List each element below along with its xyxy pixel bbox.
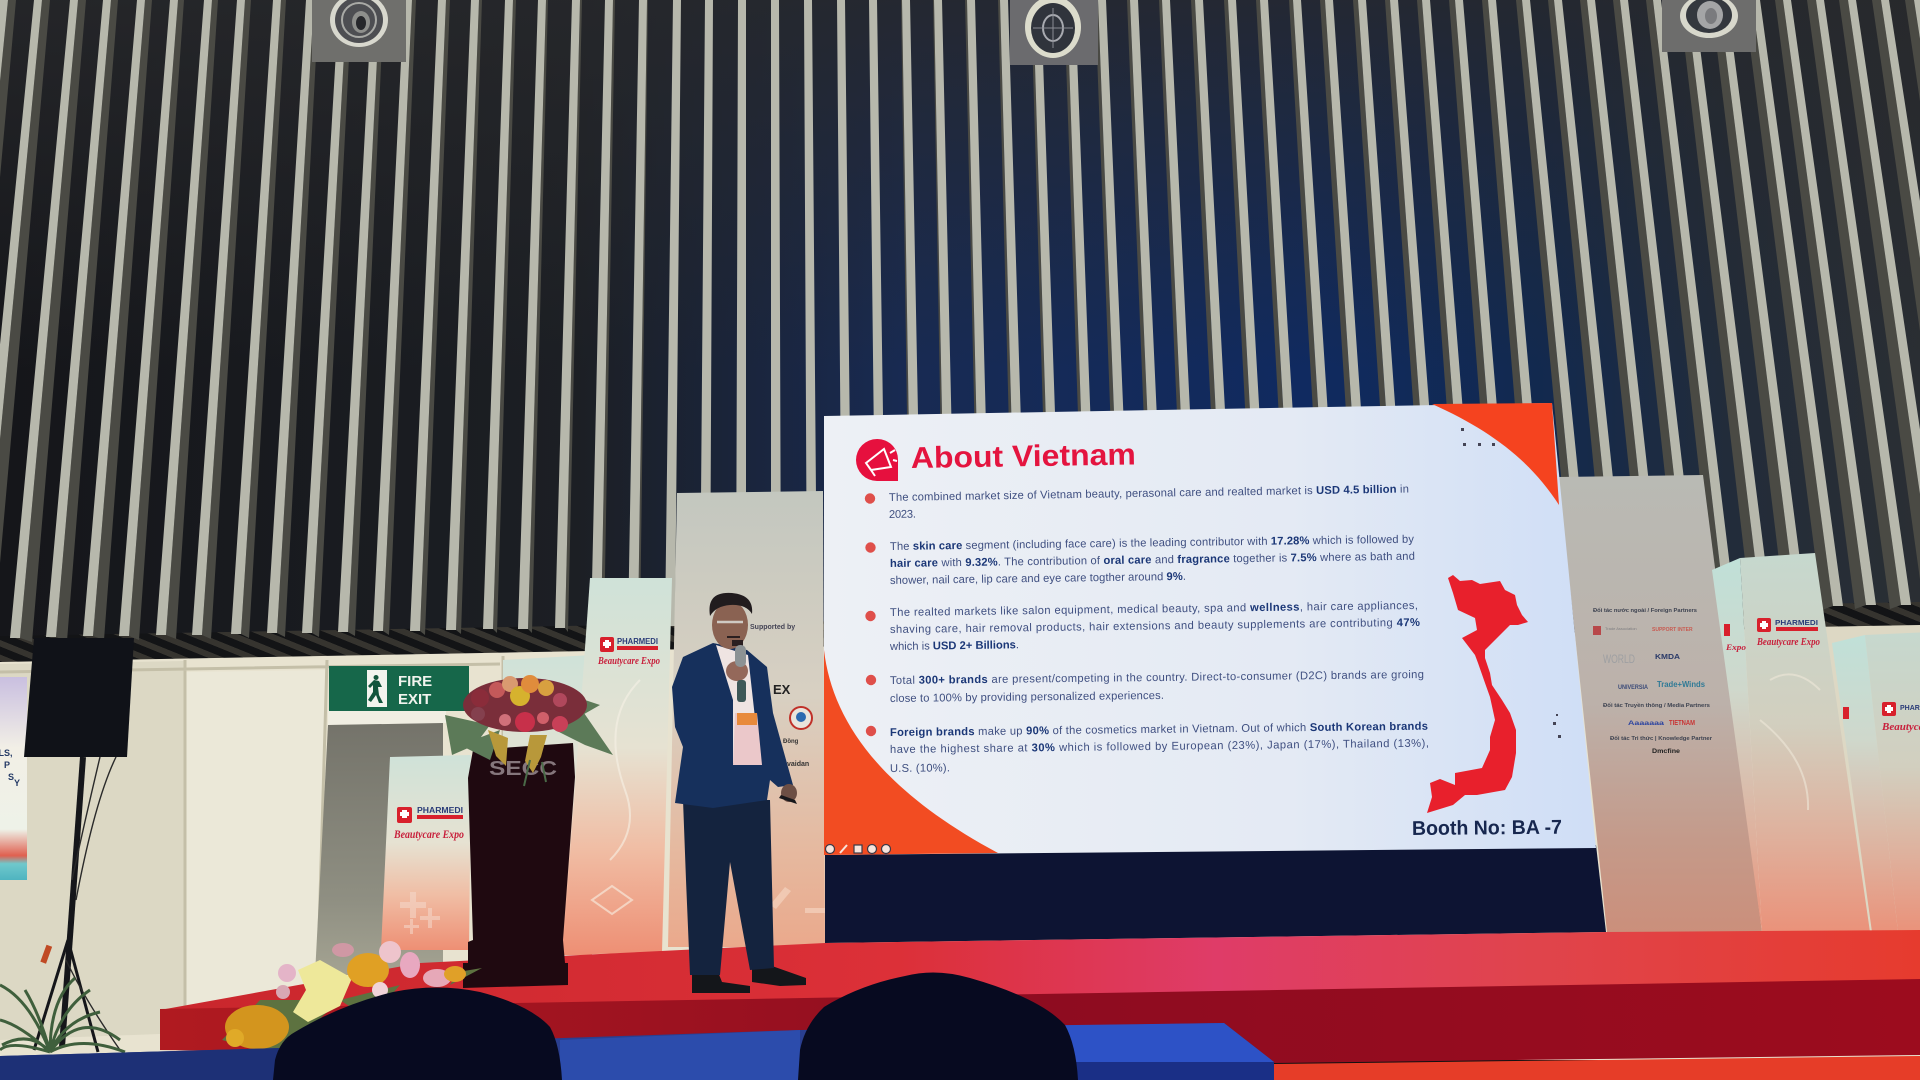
fire exit doorway [315, 708, 446, 975]
LED screen base [825, 845, 1606, 943]
audience chair left [273, 988, 562, 1080]
slide background [824, 403, 1596, 855]
paragraph: related markets: The realted markets like salon equipment, medical beauty, spa and wellness, hair care appliances, [890, 600, 1418, 619]
side logo, right banner [1724, 624, 1746, 652]
fire exit sign: FIRE [398, 673, 432, 690]
paragraph: foreign brands [890, 721, 1429, 775]
supporter panel behind speaker: EX [773, 682, 791, 697]
paragraph: foreign brands: U.S. (10%). [890, 762, 950, 775]
fire exit sign [329, 666, 469, 711]
decorative dots [1461, 428, 1561, 738]
paragraph: skin care [890, 534, 1415, 587]
partner panel right of screen: WORLD [1603, 652, 1635, 666]
speaker on stand [24, 638, 134, 1052]
partner panel right of screen: Aaaaaaa [1628, 721, 1665, 727]
partner panel right of screen: TIETNAM [1669, 720, 1695, 727]
partner panel right of screen: KMDA [1655, 654, 1680, 661]
side logo, right banner: Expo [1725, 643, 1746, 652]
podium flowers [445, 675, 613, 786]
partner panel right of screen [1558, 475, 1762, 932]
small banner in front of door [381, 755, 471, 950]
supporter panel behind speaker [668, 491, 825, 947]
ceiling vent right [1662, 0, 1756, 52]
partner panel right of screen: Đối tác nước ngoài / Foreign Partners [1593, 607, 1697, 614]
paragraph: skin care: shower, nail care, lip care and eye care togther around 9%. [890, 571, 1186, 587]
fire exit sign: EXIT [398, 691, 431, 708]
paragraph: market size [889, 483, 1409, 521]
supporter panel behind speaker: Supported by [750, 624, 795, 631]
blue front table [0, 1023, 1274, 1080]
trousers [683, 800, 774, 975]
paragraph: skin care: hair care with 9.32%. The contribution of oral care and fragrance together is 7.5% where as bath and [890, 551, 1415, 570]
stage floor [1274, 1056, 1920, 1080]
partner panel right of screen: SUPPORT INTER [1652, 627, 1693, 633]
shoe left [692, 972, 750, 993]
logo: Pharmedi and Beautycare Expo, small banner: Beautycare Expo [393, 827, 464, 841]
paragraph: skin care: The skin care segment (including face care) is the leading contributor with 17.28% which is followed by [890, 534, 1414, 553]
map of Vietnam [1427, 575, 1528, 813]
microphone [735, 645, 746, 702]
partner panel right of screen: UNIVERSIA [1618, 685, 1649, 691]
paragraph: foreign brands: have the highest share at 30% which is followed by European (23%), Japan (17%), Thailand (13%), [890, 738, 1429, 756]
left poster [0, 677, 27, 880]
louvred slat ceiling wall [0, 0, 1920, 670]
tall banner left [563, 578, 672, 955]
partner panel right of screen: Trade Association [1605, 626, 1637, 631]
slide title: About Vietnam [911, 438, 1136, 475]
paragraph: brands: Total 300+ brands are present/competing in the country. Direct-to-consumer (D2C) brands are groing [890, 669, 1424, 687]
hand holding microphone [726, 661, 748, 681]
paragraph: related markets [889, 600, 1420, 653]
partner panel right of screen: Đối tác Tri thức | Knowledge Partner [1610, 735, 1713, 742]
paragraph: related markets: shaving care, hair removal products, hair extensions and beauty supplements are contributing 47% [890, 617, 1420, 636]
ceiling vent left [312, 0, 406, 62]
logo: Pharmedi, far right banner [1881, 702, 1920, 733]
paragraph: market size: 2023. [889, 509, 916, 521]
banner far right [1832, 632, 1920, 932]
presenter [672, 593, 806, 993]
stage top surface [160, 930, 1920, 1012]
paragraph: market size: The combined market size of Vietnam beauty, perasonal care and realted market is USD 4.5 billion in [889, 483, 1409, 504]
ceiling vent centre [1010, 0, 1098, 65]
left poster: S [8, 772, 14, 782]
logo: Pharmedi and Beautycare Expo [597, 637, 660, 667]
stage front face [160, 979, 1920, 1063]
potted palm plant [0, 978, 125, 1052]
left poster: Y [14, 778, 20, 788]
partner panel right of screen: Đối tác Truyền thông / Media Partners [1603, 702, 1710, 709]
partner panel right of screen: Trade+Winds [1657, 680, 1706, 689]
icon: megaphone badge [856, 439, 898, 481]
logo: Pharmedi and Beautycare Expo: PHARMEDI [617, 637, 658, 646]
front table flowers [222, 941, 482, 1056]
podium [463, 743, 575, 988]
paragraph: related markets: which is USD 2+ Billions. [889, 639, 1019, 653]
booth number: Booth No: BA -7 [1412, 817, 1562, 840]
bullet markers [865, 493, 876, 736]
paragraph: brands: close to 100% by providing personalized experiences. [890, 690, 1164, 705]
supporter panel behind speaker: vaidan [787, 761, 809, 768]
shoe right [752, 966, 806, 986]
rear mint banner [503, 655, 592, 955]
logo: Pharmedi and Beautycare Expo, right banner [1756, 618, 1820, 648]
presentation toolbar [826, 844, 890, 854]
supporter panel behind speaker: Đồng [783, 739, 799, 745]
logo: Pharmedi and Beautycare Expo, small banner: PHARMEDI [417, 806, 463, 815]
logo: Pharmedi and Beautycare Expo, small banner [393, 806, 464, 841]
badge [733, 713, 762, 765]
head [709, 593, 752, 649]
paragraph: foreign brands: Foreign brands make up 90% of the cosmetics market in Vietnam. Out of which South Korean brands [890, 721, 1428, 739]
audience chair right [798, 972, 1078, 1080]
slide on LED screen [824, 403, 1596, 855]
side logo, far right banner [1843, 707, 1849, 719]
left poster: P [4, 760, 10, 770]
jacket [672, 643, 793, 808]
back wall panels [0, 626, 1920, 1060]
logo: Pharmedi and Beautycare Expo, right banner: PHARMEDI [1775, 620, 1818, 627]
badge header [737, 713, 757, 725]
paragraph: brands [890, 669, 1424, 705]
podium: SECC [489, 758, 557, 780]
cream wall section right [1810, 625, 1920, 932]
tall banner right [1712, 553, 1870, 932]
orange corner top right [1432, 403, 1559, 505]
logo: Pharmedi and Beautycare Expo, right banner: Beautycare Expo [1756, 636, 1820, 648]
logo: Pharmedi and Beautycare Expo: Beautycare Expo [597, 655, 660, 667]
shirt and lanyard [716, 645, 760, 763]
orange corner bottom left [824, 650, 998, 855]
hand with remote [779, 784, 797, 804]
partner panel right of screen: Dmcfine [1652, 749, 1681, 755]
stage [160, 930, 1920, 1080]
